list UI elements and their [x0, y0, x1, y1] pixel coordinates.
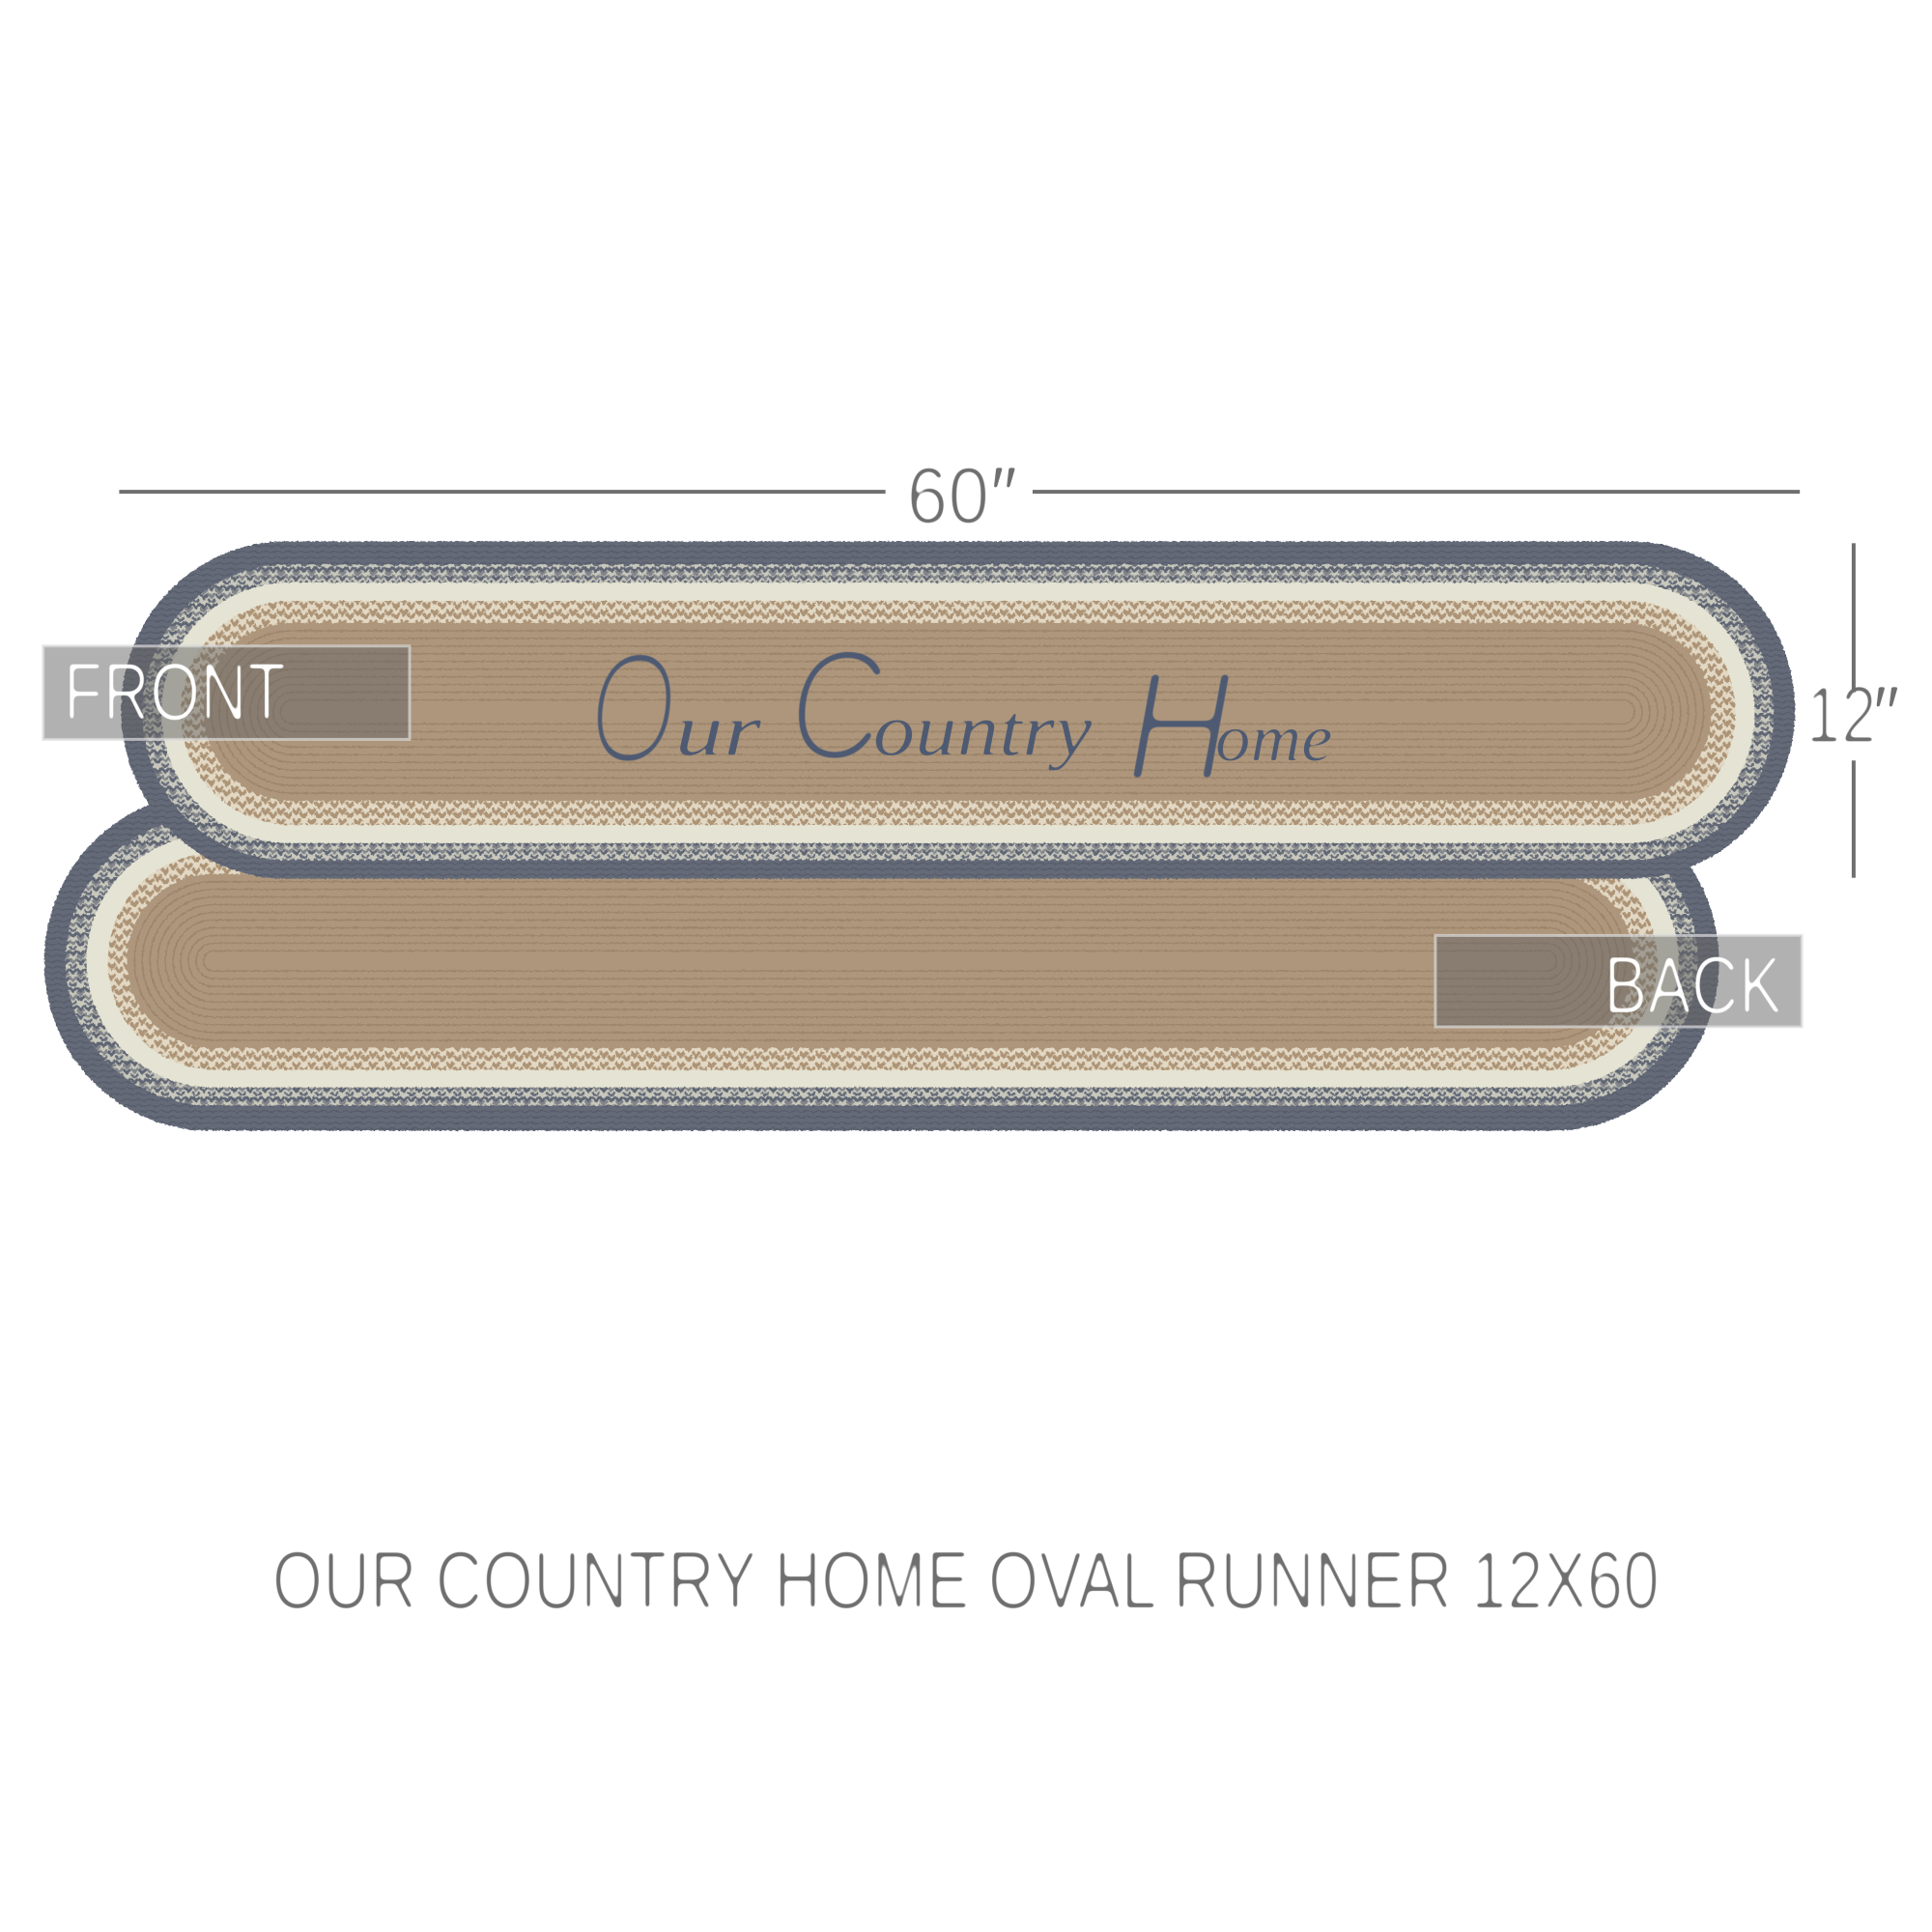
dimension line: height 12 inches: ″ [1873, 668, 1900, 759]
printed script: Our Country Home: C [788, 615, 886, 793]
label: FRONT: FRONT [64, 646, 287, 738]
dimension line: height 12 inches [1805, 543, 1900, 878]
dimension line: width 60 inches: ″ [990, 449, 1017, 540]
front rug [121, 541, 1795, 879]
printed script: Our Country Home [588, 615, 1332, 814]
printed script: Our Country Home: ountry [873, 688, 1093, 771]
dimension line: width 60 inches [119, 449, 1800, 540]
printed script: Our Country Home: ur [675, 688, 762, 771]
label: BACK [1435, 935, 1802, 1032]
dimension line: width 60 inches: 60 [907, 449, 989, 540]
printed script: Our Country Home: ome [1215, 701, 1332, 776]
printed script: Our Country Home: H [1124, 637, 1233, 814]
label: BACK: BACK [1604, 940, 1782, 1032]
dimension line: height 12 inches: 12 [1805, 668, 1877, 759]
back rug [44, 793, 1719, 1130]
printed script: Our Country Home: O [588, 618, 677, 796]
